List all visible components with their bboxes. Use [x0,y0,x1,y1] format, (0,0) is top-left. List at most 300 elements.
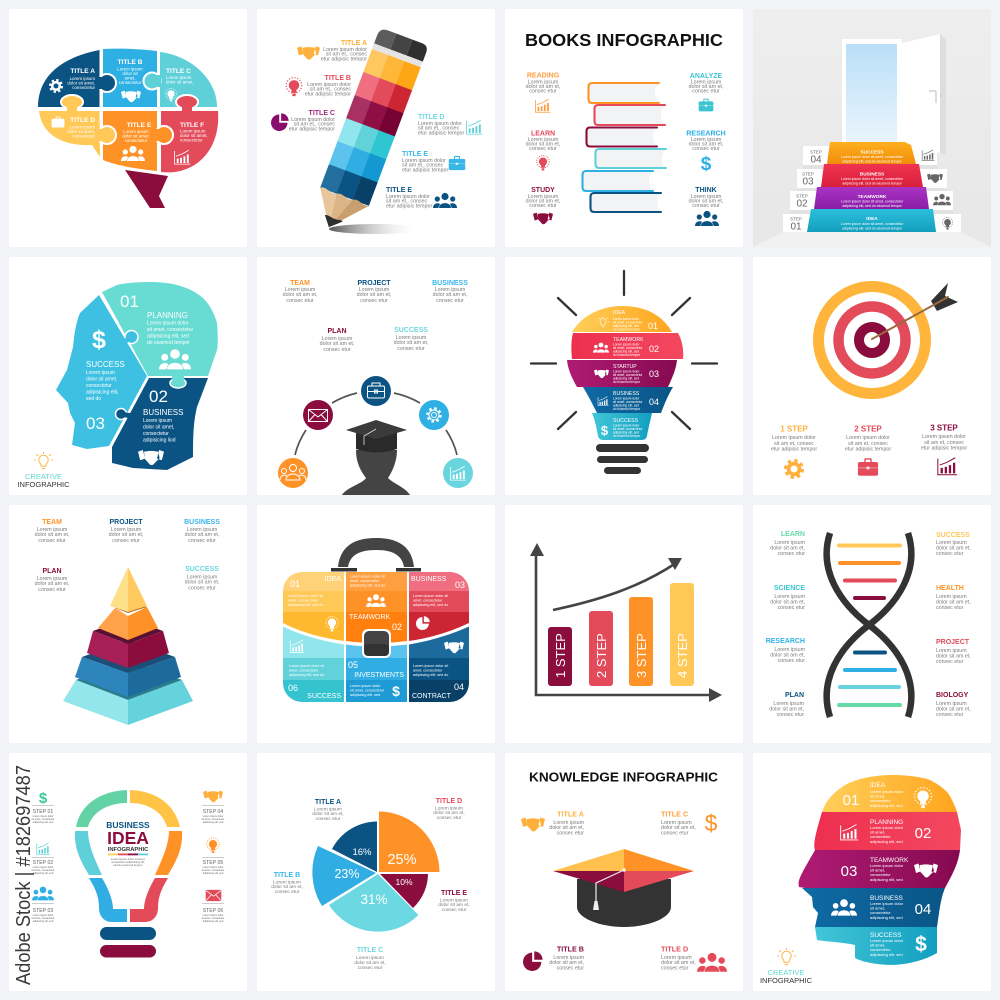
title C text: dolor sit amet, [166,80,194,84]
idea cell text: adipiscing elit, sed do [288,603,323,607]
cap front maroon [553,871,624,892]
think block: consec etur [692,203,720,209]
success text: adipiscing elit, sed [870,952,903,957]
title A text: TITLE A [70,68,95,75]
slice 16 percent [332,822,377,872]
project text: dolor sit am et, [936,654,971,660]
icon: handshake [138,450,164,465]
bulb segment red [130,878,168,922]
research block: dolor sit am et, [689,142,723,148]
step 05: sit amet, consectetur [201,869,225,872]
business cell text: amet, consectetur [413,598,443,602]
startup text: adipiscing elit, sed [613,376,639,380]
step 1 text: sit am et, consec [774,441,814,447]
idea text: Lorem ipsum dolor sit amet, consectetur [841,222,904,226]
panel: pie chart [257,753,495,991]
project text: PROJECT [357,280,391,287]
contract cell text: CONTRACT [412,693,452,700]
teamwork text: adipiscing elit, sed do eiusmod tempor [842,204,903,208]
number 03: 03 [841,863,857,880]
title E second block: sit am et,. consec [386,198,428,204]
biology text: dolor sit am et, [936,706,971,712]
step 01: STEP 01 [33,809,53,815]
learn text: Lorem ipsum [774,540,806,546]
reading block: consec etur [529,88,557,94]
pyramid level 2 [98,600,158,640]
icon: handshake [533,213,553,224]
health text: HEALTH [936,585,964,592]
heading: KNOWLEDGE INFOGRAPHIC [529,770,719,784]
teamwork text: do eiusmod tempor [613,353,641,357]
success cell text: SUCCESS [307,693,341,700]
center heading: IDEA [107,828,149,848]
bar 4 step: 4 STEP [675,633,690,678]
think block: dolor sit am et, [689,198,723,204]
title D text: consec etur [661,966,689,972]
reading block: Lorem ipsum [528,80,559,86]
business text: adipisicing liod [143,438,176,444]
startup text: Lorem ipsum dolor [613,370,640,374]
icon: people [695,211,719,226]
heading 01: 01 [120,292,139,311]
title A text: dolor sit am et, [312,811,344,817]
cap front red [624,871,694,892]
step 06: adipiscing elit, sed [203,920,224,923]
bulb segment blue [89,878,127,922]
success text: dolor sit amet, [86,376,117,382]
planning text: consectetur [870,834,891,839]
learn text: LEARN [781,531,805,538]
teamwork text: adipiscing elit, sed [613,350,639,354]
title C text: TITLE C [357,947,383,954]
title E text: Lorem ipsum [123,129,149,134]
title C text: Lorem ipsum [356,955,384,961]
number 01: 01 [648,321,658,331]
icon: people [933,194,951,205]
brain piece A [38,50,100,107]
title A text: dolor sit amet, [67,80,95,85]
project text: Lorem ipsum [936,648,967,654]
icon: bulb [166,88,176,101]
teamwork text: TEAMWORK [870,857,908,864]
title A text: Lorem ipsum [553,820,585,826]
title C block: etur adipisic tempor [289,126,335,132]
number 04: 04 [649,397,659,407]
panel: door and steps [753,9,991,247]
success text: consec etur [397,346,425,352]
icon: gear [428,408,440,422]
learn block: consec etur [529,146,557,152]
pencil [308,27,429,238]
business cell text [411,576,465,607]
pyramid level 4 [75,640,181,697]
title B text: dolor sit am et, [549,960,584,966]
pyramid level 1 [110,567,147,612]
band 3 startup [567,360,677,387]
title B text: Lorem ipsum [117,66,143,72]
icon: handshake [297,46,320,60]
logo [17,452,70,489]
icon: handshake [594,369,609,378]
step 04 [201,791,225,824]
dna strands [827,533,911,717]
title D block: TITLE D [418,114,444,121]
teamwork text: Lorem ipsum dolor [613,342,640,346]
team text: consec etur [286,298,314,304]
success text: Lorem ipsum dolor [870,938,904,943]
white stairs [783,146,961,232]
contract cell text: 04 [454,682,464,692]
study block: consec etur [529,203,557,209]
icon: bulb [537,155,549,170]
planning text: do eiusmod tempor [147,340,190,346]
project text: dolor sit am et, [357,292,391,298]
success text: dolor sit am et, [936,546,971,552]
band 1 idea [572,306,672,332]
research block: RESEARCH [686,130,726,138]
bulb rays [531,271,717,429]
bar 3 step [629,597,653,686]
title E text: dolor sit am et, [438,902,470,908]
success step [827,142,916,164]
business text: Lorem ipsum dolor sit amet, consectetur [841,177,904,181]
circle: briefcase [361,376,391,406]
panel: growth chart [505,505,743,743]
title D block: Lorem ipsum dolor [418,121,462,127]
business step [821,164,923,187]
title A block: Lorem ipsum dolor [323,47,367,53]
success text: adipiscing elit, sed do eiusmod tempor [842,160,903,164]
panel: head puzzle [9,257,247,495]
slice labels [334,847,417,907]
title D text: consec etur [437,815,462,821]
handle [338,538,414,567]
step 02: STEP 02 [33,860,53,866]
step 2 text: Lorem ipsum dolor [846,435,890,441]
title E block: sit am et,. consec [402,162,444,168]
title D text: TITLE D [70,117,95,124]
step 1 text: etur adipisic tempor [771,446,817,452]
contract cell text: adipiscing elit, sed do [413,673,448,677]
reading block: dolor sit am et, [526,84,560,90]
icon: chart [938,458,957,475]
idea text: sit amet, consectetur [613,320,643,324]
teamwork cell text: adipiscing elit, sed do [350,584,385,588]
success text: SUCCESS [860,150,884,156]
step labels: 01 [790,222,802,232]
bulb segment green [76,790,127,827]
success text: dolor sit am et, [394,340,428,346]
center heading: BUSINESS [106,820,150,830]
title B text: dolor sit am et, [271,884,303,890]
door handle [929,91,941,103]
step 1 text: Lorem ipsum dolor [772,435,816,441]
project text: PROJECT [936,639,969,646]
teamwork text: consectetur [870,872,891,877]
step 01 [31,790,55,824]
step 03: sit amet, consectetur [31,917,55,920]
bar 3 step: 3 STEP [634,633,649,678]
title B text: amet, [125,76,135,80]
title E second block: etur adipisic tempor [386,204,432,210]
heading 03: 03 [86,414,105,433]
panel: graduate arc [257,257,495,495]
title D block: sit am et,. consec [418,126,460,132]
investments cell text [348,660,404,699]
success text: adipiscing elit, sed [613,430,639,434]
planning text: sit amet, [870,830,885,834]
step labels: STEP [802,172,814,176]
planning text: PLANNING [147,311,188,320]
slice 31 percent [329,874,418,932]
team text: TEAM [42,519,62,526]
title B block: TITLE B [325,75,351,82]
icon: people [366,594,386,607]
icon: handshake [521,818,545,831]
stripe 2 planning [814,812,961,850]
science text: consec etur [778,605,805,611]
science text: SCIENCE [774,585,805,592]
title F text: dolor sit amet, [180,133,208,138]
success text: SUCCESS [870,932,901,939]
brain piece B [103,49,157,107]
planning text: sit amet, consectetur [147,327,193,333]
title E text: TITLE E [441,890,467,897]
band 2 teamwork [571,333,683,359]
cap body [577,879,671,927]
panel: briefcase [257,505,495,743]
step 3 text: sit am et, consec [924,440,964,446]
number 01: 01 [843,792,859,809]
teamwork text: TEAMWORK [613,337,644,343]
success text: Lorem ipsum dolor [613,424,640,428]
learn text: consec etur [778,551,805,557]
handle feet [331,568,421,572]
study block: dolor sit am et, [526,198,560,204]
step 3 text: Lorem ipsum dolor [922,434,966,440]
step 01: Lorem ipsum dolor [33,815,54,818]
icon: chart [841,824,858,840]
business cell text: Lorem ipsum dolor sit [413,594,448,598]
logo: INFOGRAPHIC [760,976,813,985]
plan text: Lorem ipsum [773,701,805,707]
plan text: PLAN [327,328,347,335]
brain piece D [39,111,100,157]
title E text: dolor sit amet, [122,134,150,138]
business text: BUSINESS [432,280,468,287]
title C block: TITLE C [309,110,335,117]
success text: consectetur [870,947,891,952]
title C text: dolor sit am et, [661,825,696,831]
title A text: Lorem ipsum [314,806,342,812]
health text: Lorem ipsum [936,594,967,600]
panel: business idea bulb [9,753,247,991]
icon: dollar: $ [915,933,927,956]
learn block: LEARN [531,130,555,138]
number 03: 03 [649,369,659,379]
icon: chart [450,466,466,480]
slice labels: 31% [360,892,388,907]
logo: CREATIVE [25,472,62,481]
logo: CREATIVE [768,968,804,977]
step 2 text: sit am et, consec [848,441,888,447]
title B block: etur adipisic tempor [305,92,351,98]
title B text: TITLE B [274,872,300,879]
brain piece E [103,111,157,171]
step labels: 03 [802,176,814,188]
health text: dolor sit am et, [936,600,971,606]
icon: chart [290,640,304,652]
step 2 text: 2 STEP [854,424,882,434]
team text: dolor sit am et, [283,292,317,298]
teamwork text: sit amet, consectetur [613,346,643,350]
icon: pie [523,951,543,971]
stripe 3 teamwork [799,850,960,888]
plan text: Lorem ipsum [37,576,68,582]
target rings [818,286,926,394]
pencil shadow [329,224,421,234]
tassel [593,868,626,910]
step 04: STEP 04 [203,809,223,815]
startup text: do eiusmod tempor [613,380,641,384]
bulb segment aqua [75,831,102,875]
success text: consec etur [936,551,964,557]
cap top yellow [553,849,624,871]
business text: consectetur [870,910,891,915]
case body [283,572,469,702]
puzzle knobs [116,330,186,420]
idea text: IDEA [866,217,878,222]
icon: people [433,193,457,208]
dna rungs [839,546,900,705]
slice labels: 23% [334,867,360,881]
step 02: Lorem ipsum dolor [33,866,54,869]
mortarboard [346,420,407,452]
plan text: consec etur [323,347,351,353]
icon: briefcase [699,99,713,111]
circle: mail [303,400,333,430]
success text: consec etur [188,586,216,592]
panel: head stripes [753,753,991,991]
teamwork text: Lorem ipsum dolor [870,863,904,868]
plan text: PLAN [785,692,804,699]
icon: dollar: $ [92,326,106,354]
heading: BOOKS INFOGRAPHIC [525,30,723,50]
icon: mail [308,410,328,422]
head piece 01 [102,282,218,376]
business text: Lorem ipsum [187,527,218,533]
business text: Lorem ipsum [143,418,172,424]
panel: brain puzzle [9,9,247,247]
idea cell text: 01 [290,579,300,589]
title E second block: TITLE E [386,187,412,194]
plan text: dolor sit am et, [769,706,804,712]
success text: consectetur [86,383,112,389]
success cell text: 06 [288,683,298,693]
icon: people [831,899,857,916]
step labels: STEP [796,194,808,198]
door frame [842,39,902,144]
icon: briefcase [52,116,64,128]
bar 1 step [548,627,572,686]
title D text: Lorem ipsum [661,955,692,961]
planning text: adipiscing elit, sed [870,839,903,844]
title D text: dolor sit am et, [433,810,465,816]
open door [898,34,940,153]
pyramid level 5 [63,660,193,725]
investments cell text: $ [392,683,400,699]
step 05 [201,838,225,875]
title C text: Lorem ipsum [166,75,192,80]
idea cell text [288,576,341,607]
circle: gear [419,400,449,430]
slice 25 percent [379,812,440,872]
icon: gear [786,461,802,477]
icon: bulb [914,788,932,808]
arrow [872,283,958,339]
idea cell text: Lorem ipsum dolor sit [288,594,323,598]
clasp [362,629,391,658]
title B text: Lorem ipsum [273,880,301,886]
brain piece C [160,52,217,107]
brain piece F [161,111,218,172]
step 1 text: 1 STEP [780,424,808,434]
business text: BUSINESS [184,519,220,526]
puzzle knobs [61,72,198,144]
team text: Lorem ipsum [285,287,316,293]
cap top orange [624,849,694,871]
icon: handshake [914,864,938,877]
head piece 02 [112,378,208,470]
team text: dolor sit am et, [35,532,69,538]
business cell text: 03 [455,580,465,590]
icon: handshake [444,642,464,653]
connecting arcs [295,393,457,455]
step labels [790,150,822,232]
icon: dollar: $ [601,423,609,438]
title D text: TITLE D [661,944,688,954]
title B text: TITLE B [557,944,584,954]
team text: Lorem ipsum [37,527,68,533]
project text: Lorem ipsum [111,527,142,533]
slice labels: 16% [352,847,372,858]
business cell text: adipiscing elit, sed do [413,603,448,607]
plan text: consec etur [777,712,804,718]
startup text: sit amet, consectetur [613,373,643,377]
icon: briefcase [449,156,465,170]
icon: bulb [942,217,953,229]
team text: consec etur [38,538,66,544]
business text: dolor sit amet, [143,424,174,430]
bar 2 step: 2 STEP [594,633,609,678]
success text: SUCCESS [394,327,428,334]
success text: SUCCESS [185,566,219,573]
title B text: TITLE B [118,59,142,66]
teamwork cell text: 02 [392,622,402,632]
icon: bulb [326,616,338,631]
title A block: sit am et,. consec [326,52,367,58]
plan text: dolor sit am et, [35,581,69,587]
panel: dna [753,505,991,743]
title B text: consec etur [275,889,300,895]
idea text: sit amet, [870,794,885,798]
bar 1 step: 1 STEP [553,633,568,678]
step 01: sit amet, consectetur [31,818,55,821]
circle: team [278,458,308,488]
panel: pyramid [9,505,247,743]
icon: handshake [121,91,141,102]
step labels: 04 [810,154,822,166]
